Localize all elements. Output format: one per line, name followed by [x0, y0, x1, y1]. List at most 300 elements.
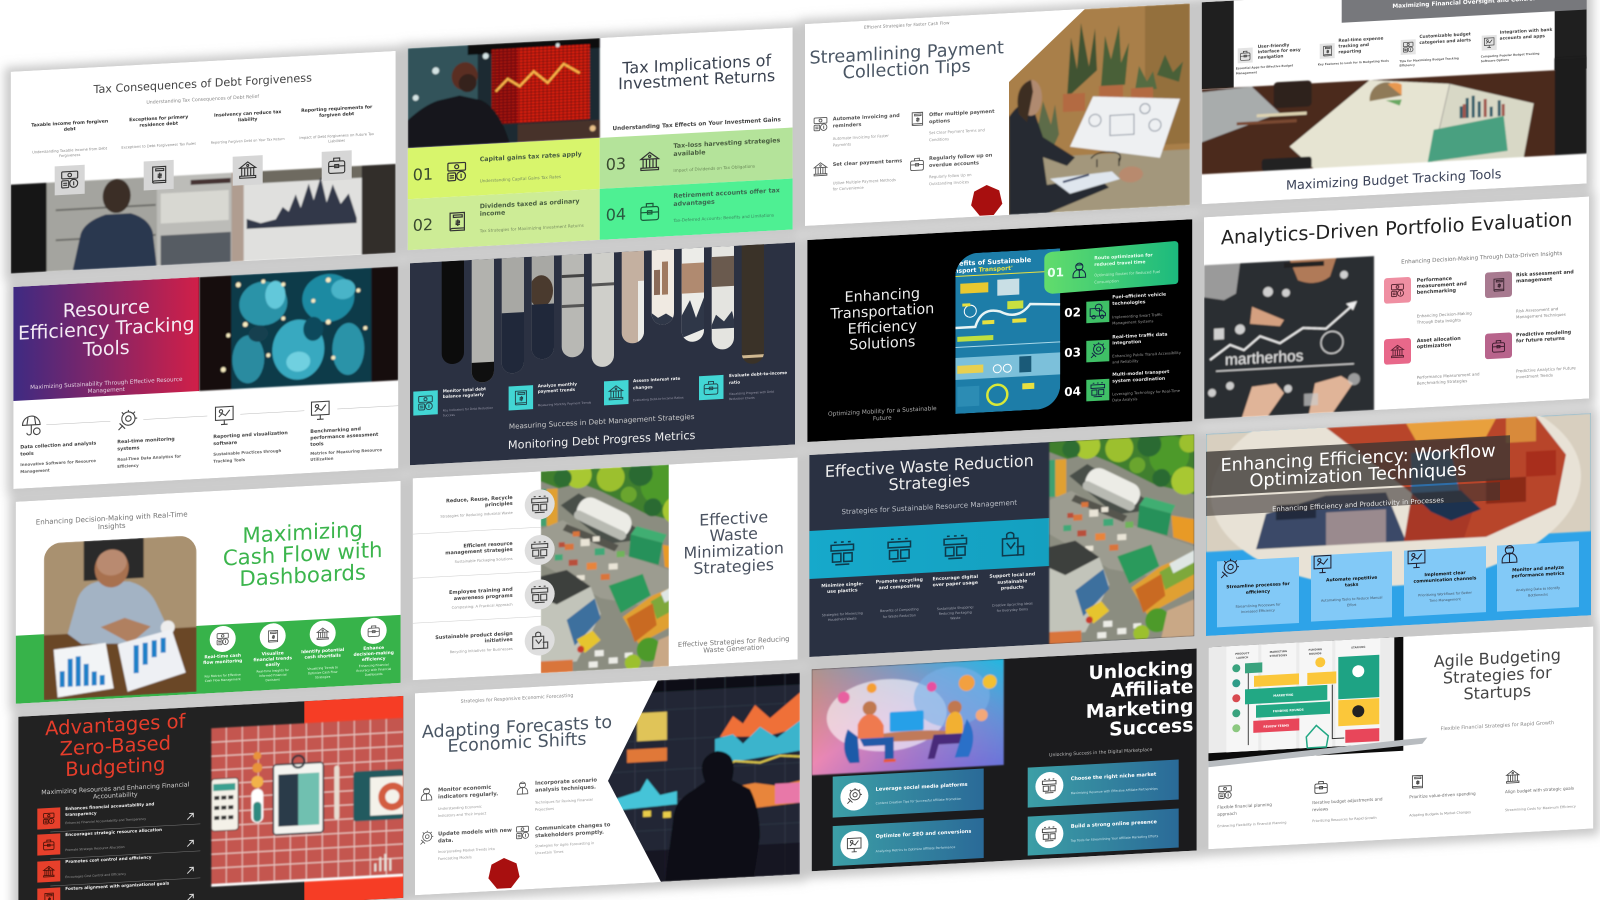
item 03 [1064, 331, 1182, 367]
item: multiple payment options [912, 108, 995, 143]
card: niche market: Choose the right niche market [1071, 772, 1157, 782]
subtitle: Unlocking Success in the Digital Marketplace [1049, 747, 1152, 758]
title: Enhancing Efficiency: Workflow [1220, 441, 1496, 476]
item: customizable categories: Efficiency [1399, 63, 1415, 68]
card 03: available [673, 149, 705, 158]
title: Adapting Forecasts to [422, 713, 612, 743]
laptop with roadmap screen: ROUNDS [1309, 651, 1322, 656]
item: exceptions [121, 114, 196, 192]
card: performance metrics: performance metrics [1512, 571, 1565, 580]
laptop with roadmap screen: FUNDING [1309, 647, 1322, 652]
item: update models: data. [438, 838, 453, 845]
title: Efficiency [848, 318, 917, 338]
header gradient [13, 277, 199, 401]
item: recycling and composting: Promote recycling [876, 577, 923, 585]
item: multiple payment options: Offer multiple payment [929, 109, 995, 118]
title: Maximizing Budget Tracking Tools [1286, 167, 1502, 194]
item: digital over paper: Encourage digital [933, 574, 978, 582]
item: reporting: Sustainable Practices through [213, 448, 282, 457]
item: real-time cash flow: Key Metrics for Effective [205, 673, 241, 679]
item: scenario analysis: Incorporate scenario [535, 777, 597, 787]
card: streamline processes: Streamlining Processes for [1235, 602, 1281, 609]
item 04: Leveraging Technology for Real-Time [1112, 389, 1181, 397]
card: social media [833, 769, 984, 818]
item: communicate: Strategies for Agile Forecasting in [535, 841, 594, 848]
item: local products: products [1001, 584, 1024, 592]
list item 2: Promote Strategic Resource Allocation [65, 845, 125, 852]
item: enhance decisions: Accuracy with Financial [356, 667, 391, 673]
item: analyze payments: Measuring Monthly Payment Trends [538, 401, 591, 407]
illustration: two marketers with laptop [812, 659, 1004, 775]
item 02 [1064, 292, 1166, 328]
panel: Unlocking Affiliate Marketing Success [812, 649, 1197, 871]
card 04 [600, 179, 793, 240]
decoration: red heptagon [488, 857, 520, 889]
card: online presence: Top Tools for Streamlining Your Affiliate Marketing Efforts [1070, 834, 1159, 843]
card: asset allocation: optimization [1417, 342, 1452, 350]
photo: man viewing financial charts [11, 164, 396, 274]
photo: chalkboard with hands drawing growth chart [1204, 256, 1374, 419]
item: sustainable design: Recycling Initiatives for Businesses [450, 647, 513, 654]
item: identify shortfalls: Strategies [315, 675, 331, 680]
item: local products [989, 531, 1035, 613]
title: Unlocking [1089, 658, 1193, 684]
item: follow up: Regularly follow up on [929, 153, 993, 162]
panel: Enhancing Efficiency: Workflow Optimization Techniques [1206, 375, 1591, 636]
item: update models [420, 826, 512, 862]
item: follow up: overdue accounts [929, 160, 979, 169]
card: automate tasks: Effort [1347, 603, 1357, 607]
item: bank integration [1481, 27, 1553, 63]
item: assess interest: Evaluating Debt-to-Income Ratios [633, 396, 684, 402]
title: Cash Flow with [223, 538, 383, 572]
card: niche market: Maximizing Revenue with Effective Affiliate Partnerships [1071, 787, 1158, 795]
card: performance benchmarking: Through Data Insights [1416, 317, 1461, 325]
item: enhance decisions: Dashboards [365, 672, 383, 677]
item 03: Enhancing Public Transit Accessibility [1112, 351, 1182, 359]
card 02: Dividends taxed as ordinary [480, 198, 580, 210]
list item 3: Encourages Cost Control and Efficiency [65, 872, 126, 879]
item: update models: Forecasting Models [438, 855, 472, 861]
title: Effective [699, 507, 768, 530]
subtitle backing band [1206, 482, 1500, 516]
subtitle: Accountability [93, 791, 138, 801]
item: sustainable design: initiatives [485, 637, 513, 644]
item: automate invoicing: Automate Invoicing for Faster [833, 133, 889, 141]
panel: Advantages of Zero-Based Budgeting [18, 696, 406, 900]
list item 2: Encourages strategic resource allocation [65, 827, 162, 837]
title: Strategies for [1443, 663, 1552, 688]
item 03: integration [1112, 339, 1141, 347]
item: sustainable design [435, 625, 555, 661]
item: update models: Incorporating Market Trends into [438, 847, 495, 854]
subtitle: Future [873, 415, 892, 422]
card: social media: Content Creation Tips for Successful Affiliate Promotion [876, 797, 961, 805]
item 03: and Reliability [1112, 359, 1139, 365]
item: reporting: Reporting requirements for [301, 104, 373, 114]
card 02: income [480, 210, 505, 218]
item 01 card: 01 [1047, 265, 1064, 280]
illustration: isometric waste yard [540, 464, 669, 674]
item: real-time cash flow: flow monitoring [203, 658, 242, 666]
card: asset allocation: Asset allocation [1417, 336, 1461, 344]
item: real-time monitoring: Efficiency [117, 463, 139, 469]
item: real-time expense: Key Features to Look for in Budgeting Tools [1318, 59, 1389, 67]
title: Efficiency Tracking [18, 313, 195, 345]
card: automate tasks [1311, 551, 1392, 622]
item: user-friendly interface: Management [1236, 70, 1258, 75]
item: taxable income [31, 118, 108, 197]
card: risk assessment: management [1516, 276, 1553, 284]
subtitle: Enhancing Efficiency and Productivity in Processes [1272, 496, 1444, 513]
subtitle: Waste Generation [703, 643, 764, 655]
panel: Agile Budgeting Strategies for Startups [1208, 627, 1593, 849]
item: minimize plastics [821, 541, 863, 622]
item: minimize plastics: use plastics [827, 587, 858, 595]
card 03: Tax-loss harvesting strategies [673, 137, 781, 150]
dark side bars [1202, 0, 1587, 89]
panel: Streamlining Payment Collection Tips [805, 3, 1190, 226]
item: strategic goals: Streamlining Costs for Maximum Efficiency [1505, 804, 1576, 812]
item: scenario analysis: Projections [535, 807, 554, 812]
item: clear terms: Utilize Multiple Payment Methods [833, 177, 896, 186]
subtitle: Enhancing Decision-Making Through Data-Driven Insights [1401, 251, 1562, 266]
item 04: system coordination [1112, 376, 1165, 385]
card 02: 02 [413, 215, 433, 235]
item: visualize trends [253, 622, 292, 683]
item 04 [1064, 368, 1181, 405]
title: Tax Implications of [621, 51, 771, 78]
title: Collection Tips [843, 57, 971, 83]
card: niche market [1028, 759, 1179, 808]
title: Maximizing [242, 517, 363, 549]
item: identify shortfalls: Identify potential [301, 647, 345, 655]
item: identify shortfalls: cash shortfalls [305, 653, 341, 661]
item: user-friendly interface [1236, 42, 1301, 75]
card: performance metrics: Analyzing Data to Identify [1516, 586, 1560, 592]
item: assess interest: Assess interest rate [633, 376, 680, 383]
infographic image: sustainable transport: nefits of Sustainable [954, 256, 1032, 268]
item: visualize trends: Decisions [266, 677, 280, 682]
title: Startups [1463, 681, 1531, 704]
item: user-friendly interface: User-friendly [1258, 42, 1290, 50]
illustration: isometric waste yard [1049, 427, 1199, 646]
subtitle: Flexible Financial Strategies for Rapid Growth [1440, 720, 1554, 732]
title: Strategies [888, 471, 970, 494]
card: SEO: Analyzing Metrics to Optimize Affiliate Performance [876, 845, 955, 853]
card: streamline processes: Streamline processes for [1226, 581, 1290, 590]
list item 1: Enhances Financial Accountability and Transparency [65, 817, 146, 825]
item: enhance decisions: decision-making [353, 650, 394, 658]
item: customizable categories: Customizable budget [1419, 31, 1471, 40]
item: assess interest: changes [633, 384, 653, 390]
laptop with roadmap screen: STRATEGIES [1269, 653, 1287, 658]
item: real-time cash flow: Real-time cash [204, 653, 241, 661]
card: risk assessment: Management Techniques [1516, 312, 1566, 319]
card: performance metrics [1497, 541, 1579, 612]
item: digital over paper: Sustainable Shopping: [937, 605, 974, 611]
card: SEO [833, 818, 984, 866]
item: real-time expense: reporting [1338, 48, 1361, 55]
title: Minimization [684, 538, 784, 563]
list item 3 [37, 856, 200, 886]
title: Economic Shifts [447, 730, 587, 757]
item: reduce reuse recycle: Strategies for Reducing Industrial Waste [440, 511, 513, 519]
title: Tax Consequences of Debt Forgiveness [92, 71, 312, 96]
title: Enhancing [845, 286, 920, 306]
item: real-time cash flow [203, 625, 242, 683]
item: benchmarking: performance assessment [310, 432, 379, 441]
decoration: red heptagon [971, 184, 1002, 216]
card: SEO: Optimize for SEO and conversions [876, 829, 971, 840]
item 03: Real-time traffic data [1112, 332, 1167, 341]
item: enhance decisions: Enhancing Financial [359, 663, 389, 668]
item 02: 02 [1064, 305, 1081, 320]
card: social media: Leverage social media platforms [876, 782, 968, 793]
item 04: Multi-modal transport [1112, 369, 1170, 378]
card: communication channels: communication channels [1414, 575, 1477, 585]
item: flexible planning [1217, 783, 1286, 828]
title: Affiliate [1111, 677, 1193, 702]
item: local products: Support local and [989, 571, 1035, 580]
laptop with roadmap screen: STAFFING [1351, 645, 1365, 650]
card 04: Retirement accounts offer tax [673, 187, 780, 200]
list item 2 [37, 825, 200, 860]
item: analyze payments: payment trends [538, 387, 576, 394]
list item 4: Fosters alignment with organizational goals [65, 881, 170, 891]
item: bank integration: accounts and apps [1500, 33, 1545, 42]
item: real-time expense: Real-time expense [1338, 35, 1383, 44]
card 03: Impact of Dividends on Tax Obligations [673, 164, 755, 173]
item 01 card: Consumption [1094, 279, 1119, 285]
infographic image: sustainable transport: nsport Transport' [954, 265, 1013, 275]
item: monitor indicators: Indicators and Their Impact [438, 811, 487, 818]
item: iterative adjustments: Iterative budget adjustments and [1312, 796, 1383, 805]
item: visualize trends: Visualize [262, 650, 284, 657]
item: iterative adjustments [1312, 778, 1383, 823]
item: iterative adjustments: reviews [1312, 806, 1328, 812]
card: performance benchmarking: Enhancing Decision-Making [1417, 311, 1472, 319]
item: visualize trends: easily [265, 661, 280, 668]
title: Transportation [829, 301, 934, 323]
item: digital over paper [933, 535, 978, 621]
item: evaluate ratio: Visualizing Progress with Debt [729, 390, 775, 396]
item: clear terms [814, 158, 902, 193]
title: Resource [63, 296, 150, 322]
item: communicate [516, 822, 611, 856]
item: recycling and composting: Benefits of Composting [880, 607, 919, 613]
card: automate tasks: Automate repetitive [1326, 575, 1377, 584]
panel: Tax Implications of Investment Returns [408, 28, 793, 250]
title: Dashboards [239, 560, 366, 592]
card: online presence [1028, 808, 1179, 856]
item 02: Fuel-efficient vehicle [1112, 292, 1166, 301]
card 04: Tax-Deferred Accounts: Benefits and Limitations [672, 213, 774, 223]
card: communication channels [1404, 546, 1486, 617]
item: minimize plastics: Minimize single- [821, 581, 863, 589]
card 01: 01 [413, 164, 433, 185]
item: sustainable design: Sustainable product design [435, 631, 513, 641]
item: follow up: Regularly follow Up on [929, 172, 972, 179]
card: streamline processes: efficiency [1246, 589, 1270, 596]
card: asset allocation [1384, 334, 1480, 388]
item: reduce reuse recycle [440, 489, 555, 525]
card: risk assessment: Risk Assessment and [1516, 306, 1559, 313]
item: taxable income: Understanding Taxable Income from Debt [32, 146, 108, 155]
item: real-time monitoring [117, 406, 207, 469]
item: efficient resources [445, 534, 555, 570]
item: automate invoicing: Payments [833, 142, 851, 148]
item: identify shortfalls: Visualizing Trends to [307, 665, 338, 671]
item: assess interest [604, 376, 684, 405]
panel: Effective Waste Minimization Strategies [413, 451, 798, 682]
item: recycling and composting: for Waste Reduction [883, 613, 916, 619]
item: benchmarking: Benchmarking and [310, 426, 361, 435]
item: customizable categories: categories and alerts [1419, 37, 1471, 46]
photo: man with bar charts at desk [44, 535, 197, 700]
subtitle: Strategies for Responsive Economic Forecasting [461, 693, 573, 705]
item: monitor balance [413, 386, 493, 419]
item: analyze payments [509, 381, 591, 410]
title: Tools [82, 337, 130, 361]
card: predictive modeling: Predictive Analytics for Future [1516, 365, 1576, 373]
item: local products: Creative Upcycling Ideas [992, 601, 1033, 608]
item: monitor indicators: Monitor economic [438, 785, 491, 794]
card: predictive modeling [1485, 329, 1576, 381]
item: analyze payments: Analyze monthly [538, 381, 577, 388]
subtitle: Enhancing Decision-Making with Real-Time [36, 509, 188, 527]
item: evaluate ratio: Reduction Charts [729, 396, 755, 401]
photo: chalkboard with hands drawing growth chart: martherhos [1225, 348, 1304, 369]
laptop with roadmap screen [1208, 635, 1427, 767]
title: Strategies [693, 555, 774, 578]
item: employee training: awareness programs [454, 593, 513, 602]
illustration: budget grid [211, 718, 406, 887]
item: visualize trends: Real-Time Insights for [257, 668, 290, 674]
item: taxable income: debt [64, 126, 76, 133]
title: Analytics-Driven Portfolio Evaluation [1221, 207, 1572, 249]
laptop with roadmap screen: MARKETING [1270, 649, 1287, 654]
item: value-driven spending: Prioritize value-driven spending [1409, 791, 1476, 799]
card 04: 04 [606, 205, 626, 225]
photo: investor watching ticker board [408, 38, 600, 148]
card: asset allocation: Performance Measurement and [1417, 371, 1480, 380]
infographic image: sustainable transport [954, 248, 1060, 414]
title: Marketing [1086, 696, 1193, 723]
laptop with roadmap screen: LAUNCH [1236, 655, 1248, 660]
panel: Maximizing Cash Flow with Dashboards [16, 481, 401, 704]
item: exceptions: Exceptions to Debt Forgiveness Tax Rules [121, 142, 196, 150]
item: visualize trends: financial trends [253, 655, 292, 663]
item: monitor indicators [421, 784, 498, 819]
item: clear terms: Set clear payment terms [833, 158, 902, 168]
item: exceptions: Exceptions for primary [129, 114, 188, 123]
laptop with roadmap screen: FUNDING ROUNDS [1273, 708, 1304, 713]
item: reporting [213, 402, 304, 464]
green band [16, 615, 401, 704]
item: digital over paper: over paper usage [933, 580, 978, 588]
item 02: Implementing Smart Traffic [1112, 313, 1163, 320]
panel: Resource Efficiency Tracking Tools [13, 266, 401, 489]
item: evaluate ratio: ratio [729, 379, 740, 385]
photo strips: man viewing charts [435, 244, 768, 387]
item: insolvency: Insolvency can reduce tax [214, 109, 281, 119]
list item 1: Enhances financial accountability and [65, 801, 154, 811]
card 03: 03 [606, 154, 626, 174]
subtitle: Understanding Tax Effects on Your Investment Gains [613, 117, 781, 132]
item: identify shortfalls [301, 619, 345, 680]
red side block [304, 696, 403, 900]
item: scenario analysis [517, 777, 597, 813]
item: bank integration: Integration with bank [1500, 27, 1553, 36]
subtitle: Optimizing Mobility for a Sustainable [828, 406, 937, 418]
item: flexible planning: Flexible financial planning [1217, 802, 1272, 810]
card 01 [408, 138, 600, 199]
item: multiple payment options: Set Clear Payment Terms and [929, 127, 985, 135]
item: local products: for Everyday Items [997, 607, 1028, 613]
laptop with roadmap screen: REVIEW TERMS [1263, 723, 1289, 729]
item: real-time monitoring: Real-Time Data Analytics for [117, 453, 181, 462]
item: multiple payment options: options [929, 118, 950, 125]
item: iterative adjustments: Prioritizing Resources for Rapid Growth [1312, 816, 1377, 823]
item: reporting: software [213, 440, 238, 447]
item: digital over paper: Waste [950, 616, 960, 620]
item 03: 03 [1064, 345, 1081, 360]
item: communicate: stakeholders promptly. [535, 830, 604, 839]
item: real-time monitoring: systems [117, 445, 140, 452]
subtitle: Efficient Strategies for Faster Cash Flow [864, 20, 950, 31]
item: employee training: Employee training and [449, 587, 513, 596]
item: minimize plastics: Strategies for Minimizing [822, 611, 863, 617]
card: communication channels: Implement clear [1424, 570, 1466, 578]
card 01: Understanding Capital Gains Tax Rates [480, 174, 561, 183]
card: communication channels: Time Management [1428, 597, 1462, 603]
item: data collection: Data collection and analysis [20, 441, 96, 451]
item: follow up [911, 153, 993, 187]
item: visualize trends: Informed Financial [259, 673, 287, 678]
item: user-friendly interface: navigation [1258, 53, 1283, 61]
item: communicate: Communicate changes to [535, 822, 611, 832]
item: reporting: Tracking Tools [213, 457, 246, 464]
item 04: Data Analysis [1112, 397, 1138, 403]
item: enhance decisions: Enhance [363, 645, 384, 652]
item: flexible planning: Embracing Flexibility in Financial Planning [1217, 821, 1286, 828]
item 02: Management Systems [1112, 319, 1153, 326]
item: reporting: forgiven debt [319, 111, 355, 119]
subtitle: Measuring Success in Debt Management Strategies [509, 412, 695, 431]
panel: Adapting Forecasts to Economic Shifts [415, 673, 800, 895]
item: real-time monitoring: Real-time monitoring [117, 436, 175, 445]
card: predictive modeling: for future returns [1516, 336, 1565, 344]
card: performance benchmarking: Performance [1417, 276, 1453, 284]
item: user-friendly interface: Essential Apps for Effective Budget [1236, 63, 1294, 70]
item: value-driven spending: Adapting Budgets to Market Changes [1409, 810, 1471, 817]
item: reduce reuse recycle: principles [485, 501, 513, 508]
item: benchmarking: Utilization [310, 456, 334, 462]
item 04: 04 [1064, 384, 1081, 399]
subtitle: Maximizing Resources and Enhancing Financial [41, 781, 190, 796]
item: digital over paper: Reducing Packaging [939, 610, 972, 616]
card 01: Capital gains tax rates apply [480, 151, 582, 163]
item: bank integration: Comparing Popular Budget Tracking [1481, 51, 1539, 59]
item: monitor balance: Success [443, 413, 455, 418]
item: strategic goals: Align budget with strategic goals [1505, 786, 1574, 794]
item 01 card: Optimizing Routes for Reduced Fuel [1094, 270, 1160, 278]
item: insolvency: Reporting Forgiven Debt on Your Tax Return [211, 137, 285, 145]
card: predictive modeling: Predictive modeling [1516, 329, 1572, 338]
laptop with roadmap screen: MARKETING [1273, 693, 1294, 698]
card: performance benchmarking [1384, 274, 1472, 327]
